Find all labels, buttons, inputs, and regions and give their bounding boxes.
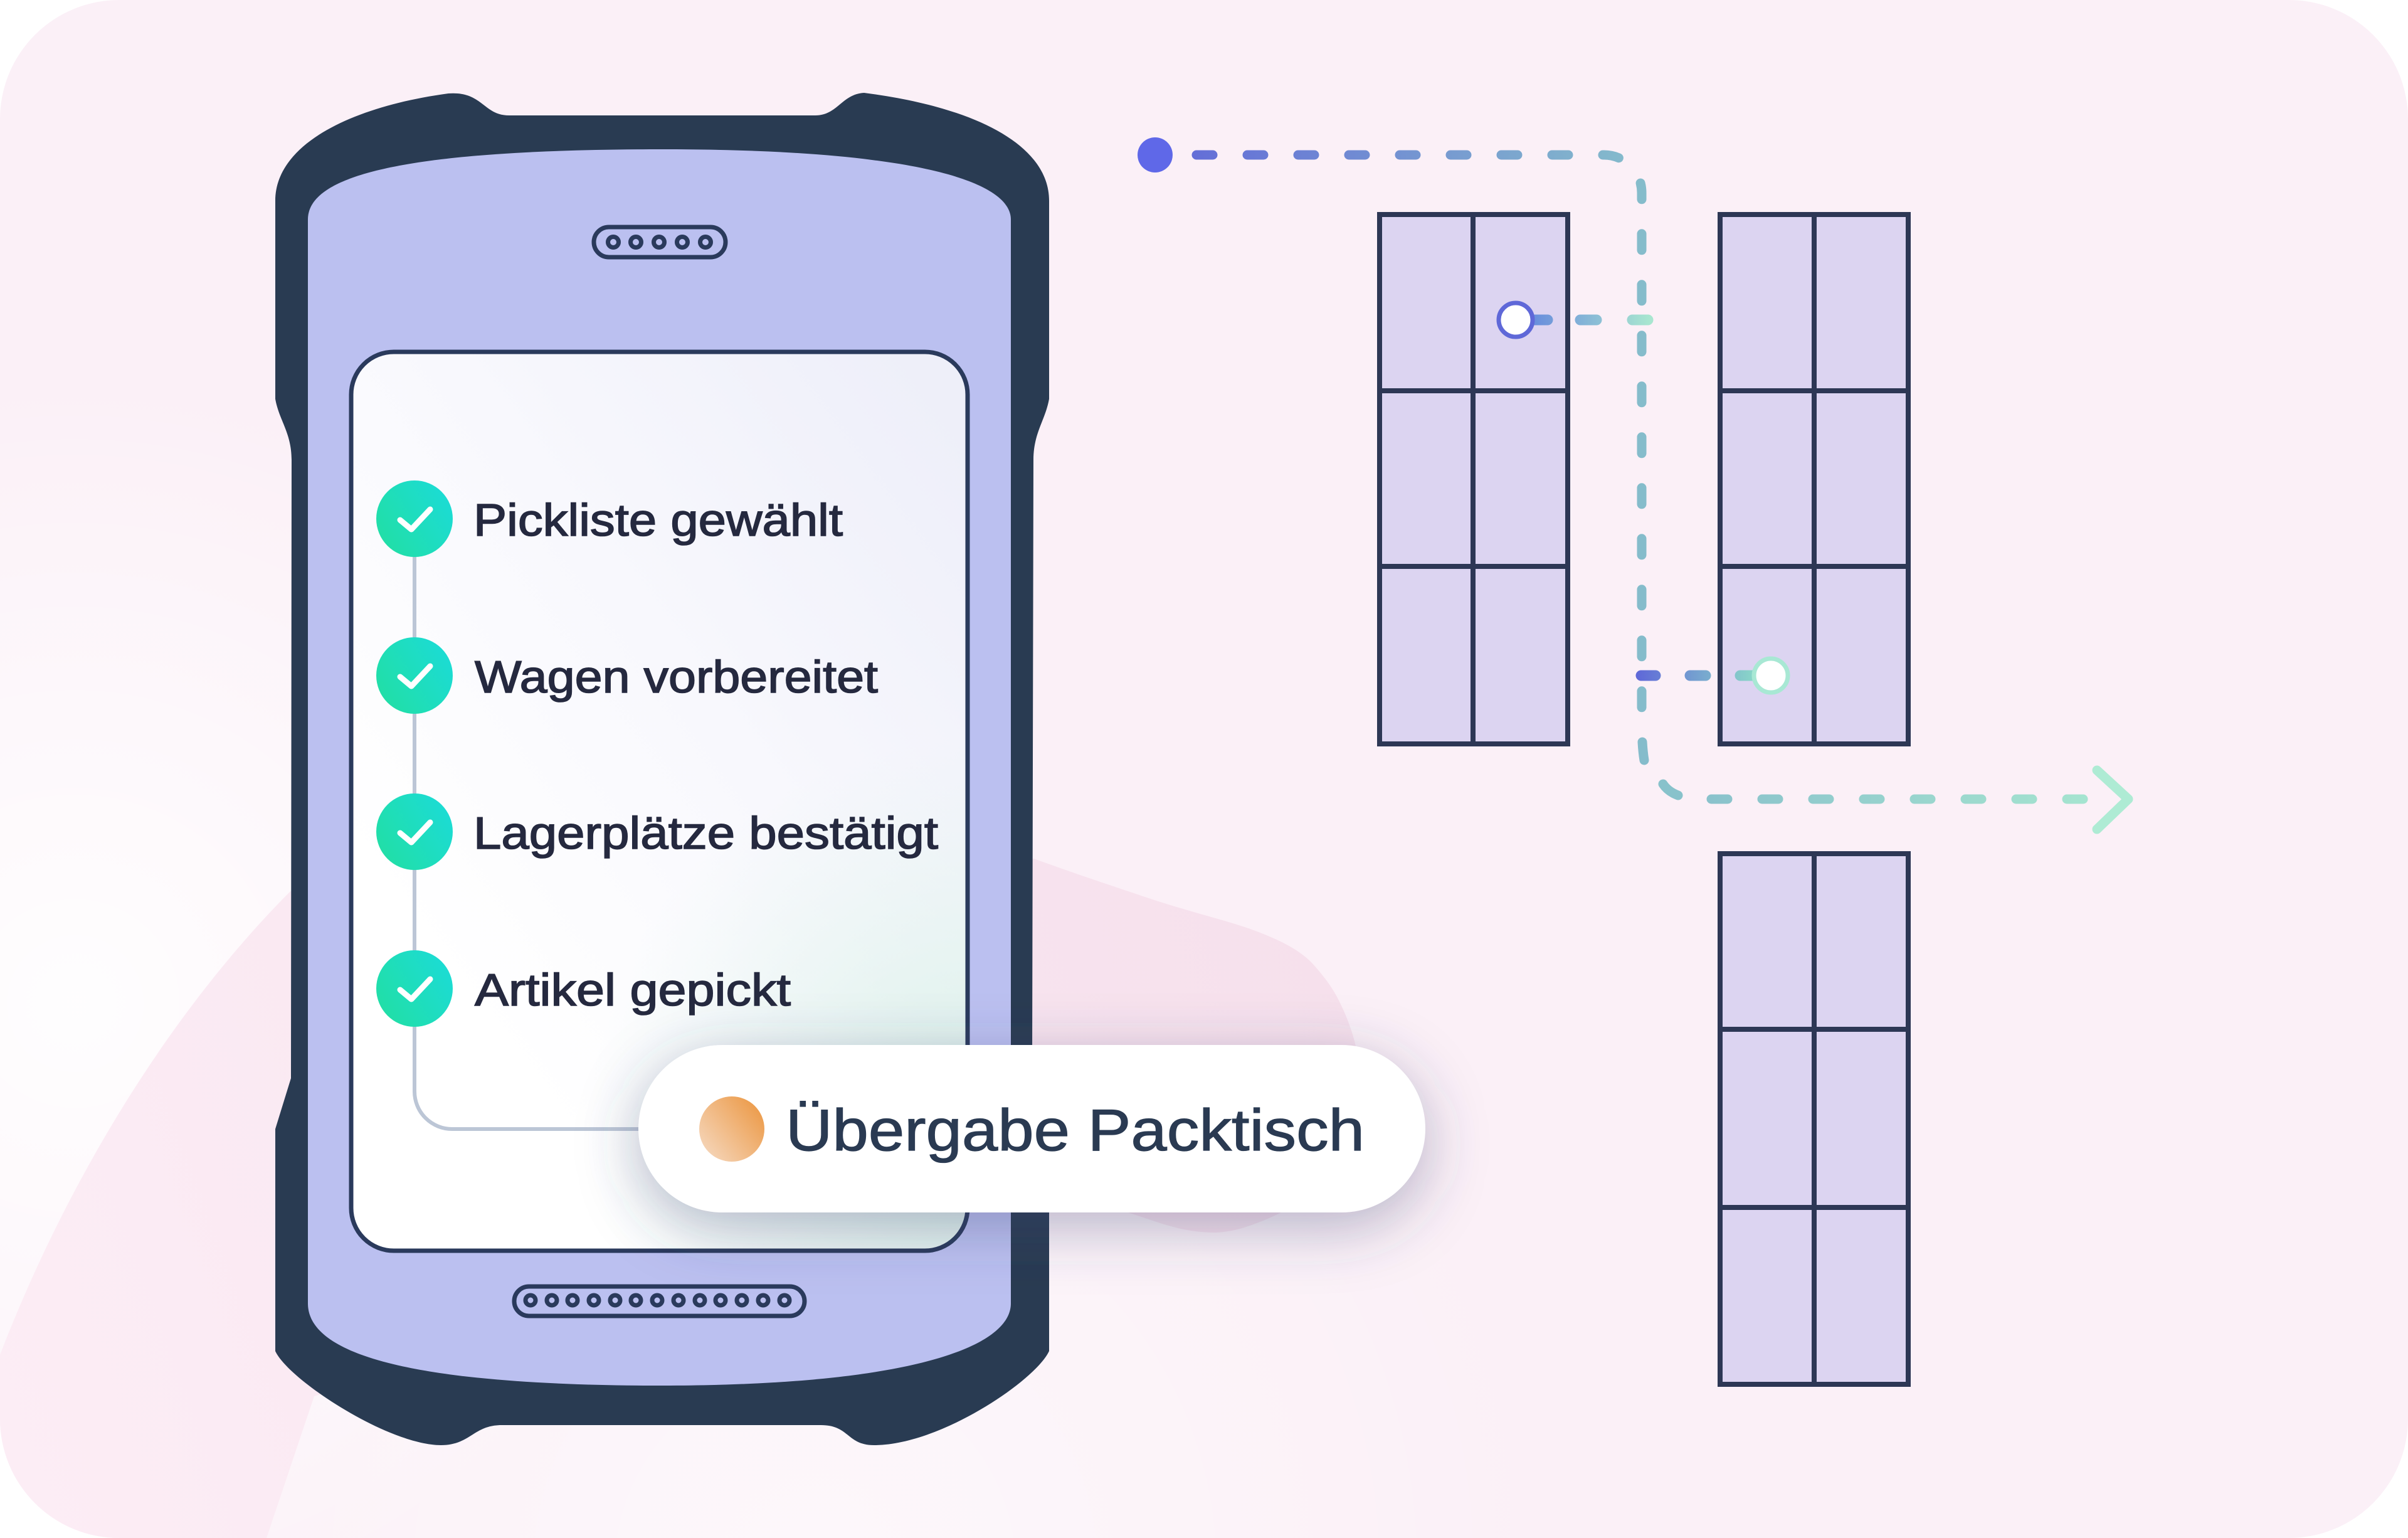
route: branch to rack 1 <box>1499 303 1648 337</box>
route: dashed walking path <box>1196 155 2085 799</box>
step: Artikel gepickt: Artikel gepickt <box>475 965 791 1016</box>
callout: Übergabe Packtisch <box>638 1045 1425 1212</box>
callout status dot <box>699 1096 764 1162</box>
warehouse rack 1 <box>1380 215 1568 744</box>
phone screen <box>351 352 968 1251</box>
step: Pickliste gewählt: Pickliste gewählt <box>473 496 843 546</box>
bottom speaker <box>514 1286 805 1316</box>
step: Wagen vorbereitet <box>376 637 878 714</box>
step: Lagerplätze bestätigt <box>376 793 938 870</box>
step: Lagerplätze bestätigt: Lagerplätze bestätigt <box>473 809 938 859</box>
route: branch to rack 2 <box>1641 659 1788 692</box>
callout text: Übergabe Packtisch <box>786 1097 1365 1163</box>
top speaker <box>594 227 726 257</box>
phone device <box>275 93 1049 1445</box>
phone rugged case <box>275 93 1049 1445</box>
step: Artikel gepickt <box>376 950 791 1027</box>
callout shadow <box>638 1060 1425 1228</box>
checklist <box>376 480 938 1027</box>
warehouse rack 2 <box>1720 215 1908 744</box>
step: Pickliste gewählt <box>376 480 843 557</box>
phone front face <box>308 149 1011 1386</box>
route: start point <box>1138 137 1173 172</box>
step: Wagen vorbereitet: Wagen vorbereitet <box>475 652 878 703</box>
checklist connector line <box>415 519 652 1129</box>
route: arrowhead <box>2097 770 2128 829</box>
warehouse rack 3 <box>1720 854 1908 1384</box>
